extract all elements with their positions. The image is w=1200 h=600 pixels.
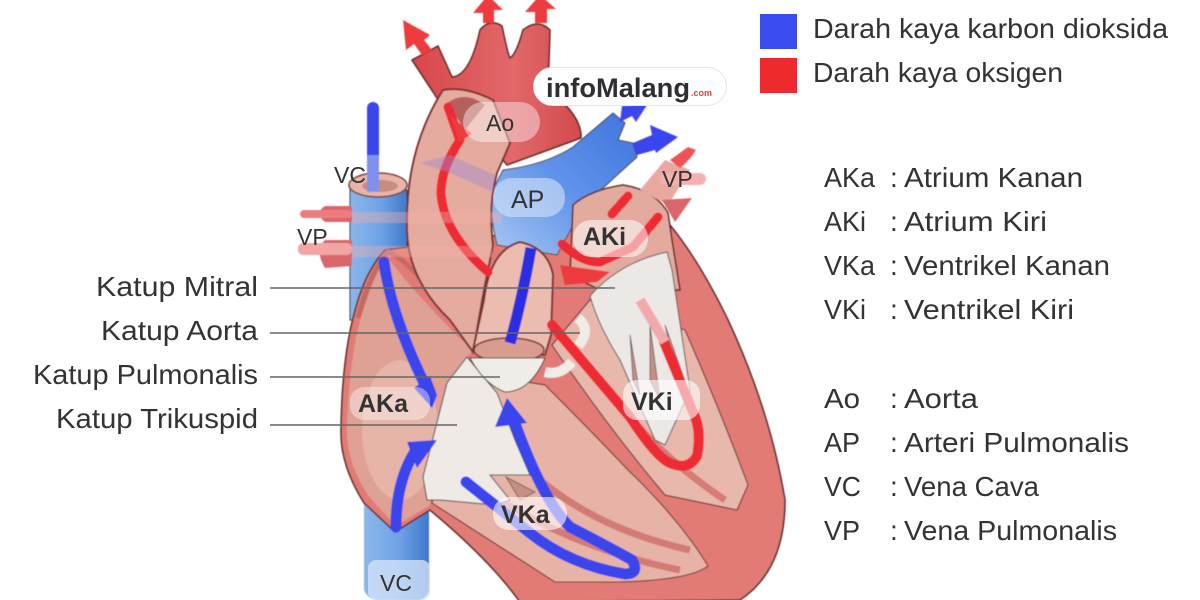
logo badge: infoMalang: [546, 73, 690, 103]
label: AKi: [573, 220, 648, 257]
legend text: oxygen: Darah kaya oksigen: [813, 57, 1063, 88]
label: VC bottom: [368, 560, 430, 600]
valve leader lines: [270, 288, 615, 425]
valve labels: Katup Mitral: [96, 271, 258, 302]
abbreviation key: vessels: Vena Pulmonalis: [904, 515, 1117, 546]
arrow: aortic arch flow: [441, 140, 488, 272]
legend swatch: blue: [760, 14, 797, 49]
valve labels: [33, 271, 258, 434]
right atrium light zone: [362, 360, 438, 500]
red arrow heads: [403, 0, 610, 285]
abbreviation key: chambers: [824, 162, 1110, 325]
ventricle muscle stripes: [502, 426, 727, 574]
arrow: right atrium descending: [384, 262, 430, 395]
inferior vena cava: [364, 500, 429, 600]
aortic arch: [407, 89, 510, 352]
red flow arrows: [441, 107, 699, 466]
abbreviation key: chambers: VKa: [824, 250, 875, 281]
label: VP left: VP: [297, 224, 328, 250]
heart artwork: [298, 0, 785, 600]
label: Ao: Ao: [486, 110, 514, 136]
valve labels: Katup Trikuspid: [56, 403, 258, 434]
heart muscle: [341, 202, 785, 600]
abbreviation key: chambers: :: [890, 206, 898, 237]
abbreviation key: vessels: AP: [824, 427, 860, 458]
abbreviation key: vessels: :: [890, 471, 898, 502]
label: AKa: AKa: [358, 390, 409, 418]
abbreviation key: vessels: VC: [824, 471, 861, 502]
legend text: carbon dioxide: Darah kaya karbon dioksida: [813, 13, 1168, 44]
logo badge: [534, 68, 726, 106]
abbreviation key: chambers: Atrium Kanan: [904, 162, 1083, 193]
label: VC top: VC: [334, 162, 366, 188]
arrow: pulmonary vein into atrium: [562, 244, 598, 262]
abbreviation key: chambers: :: [890, 294, 898, 325]
abbreviation key: vessels: :: [890, 427, 898, 458]
legend swatch: red: [760, 58, 797, 93]
translucent vein bands: [352, 212, 502, 257]
arrow: inferior vena cava into atrium: [396, 450, 416, 527]
abbreviation key: vessels: [824, 383, 1129, 546]
abbreviation key: vessels: VP: [824, 515, 860, 546]
arrow: right ventricle loop: [466, 415, 635, 574]
abbreviation key: chambers: :: [890, 162, 898, 193]
atrial wall rim: [356, 248, 418, 318]
legend: [760, 13, 1168, 93]
tricuspid valve: [423, 357, 530, 505]
valve labels: Katup Aorta: [101, 315, 258, 346]
blue flow arrows: [373, 108, 635, 574]
label: VP right: VP: [662, 166, 693, 192]
left atrium: [570, 185, 680, 290]
label: Ao: [463, 102, 540, 142]
abbreviation key: chambers: :: [890, 250, 898, 281]
arrow: left atrium return: [600, 217, 658, 262]
abbreviation key: vessels: :: [890, 515, 898, 546]
label: VKi: [623, 380, 700, 420]
label: VKa: VKa: [501, 501, 551, 529]
left ventricle: [552, 300, 748, 510]
label: VKa: [493, 497, 567, 530]
blue arrow heads: [407, 105, 678, 468]
arrow: aorta descending: [448, 107, 459, 138]
abbreviation key: vessels: Ao: [824, 383, 860, 414]
abbreviation key: chambers: Atrium Kiri: [904, 206, 1047, 237]
flow through aorta band: [420, 155, 495, 192]
abbreviation key: chambers: AKa: [824, 162, 875, 193]
abbreviation key: vessels: :: [890, 383, 898, 414]
right pulmonary veins: [640, 147, 706, 222]
arrow: vena cava top: [367, 108, 379, 155]
abbreviation key: chambers: AKi: [824, 206, 866, 237]
abbreviation key: vessels: Aorta: [904, 383, 978, 414]
label: AKa: [350, 387, 430, 420]
right ventricle: [432, 372, 708, 582]
abbreviation key: chambers: Ventrikel Kanan: [904, 250, 1110, 281]
arrow: vena cava fading: [367, 155, 379, 192]
arrow: left atrium dashes: [612, 196, 628, 214]
label: VKi: VKi: [631, 388, 673, 416]
right atrium: [347, 258, 472, 526]
faded valve flow: [640, 300, 665, 342]
pulmonary trunk: [473, 242, 553, 355]
superior vena cava: [349, 173, 407, 320]
label: AP: [493, 178, 565, 217]
heart illustration: [297, 0, 785, 600]
aortic valve cuff: [545, 318, 585, 373]
abbreviation key: vessels: Arteri Pulmonalis: [904, 427, 1129, 458]
upper aorta with branches: [412, 23, 581, 165]
valve labels: Katup Pulmonalis: [33, 359, 258, 390]
pulmonary artery: [490, 113, 637, 255]
chordae detail: [506, 325, 690, 500]
mitral valve and chordae: [590, 252, 690, 445]
arrow: left ventricle flow: [552, 325, 699, 466]
left pulmonary veins: [298, 206, 352, 268]
abbreviation key: chambers: VKi: [824, 294, 866, 325]
label: AKi: AKi: [583, 223, 626, 251]
pulmonary valve: [470, 358, 545, 392]
arrow: pulmonary trunk: [510, 248, 531, 343]
label: VC bottom: VC: [380, 570, 412, 596]
abbreviation key: vessels: Vena Cava: [904, 471, 1039, 502]
logo badge: .com: [691, 88, 712, 98]
abbreviation key: chambers: Ventrikel Kiri: [904, 294, 1074, 325]
label: AP: AP: [511, 186, 544, 214]
pulmonary valve ring: [474, 338, 544, 362]
aorta lumen dark: [447, 97, 485, 130]
